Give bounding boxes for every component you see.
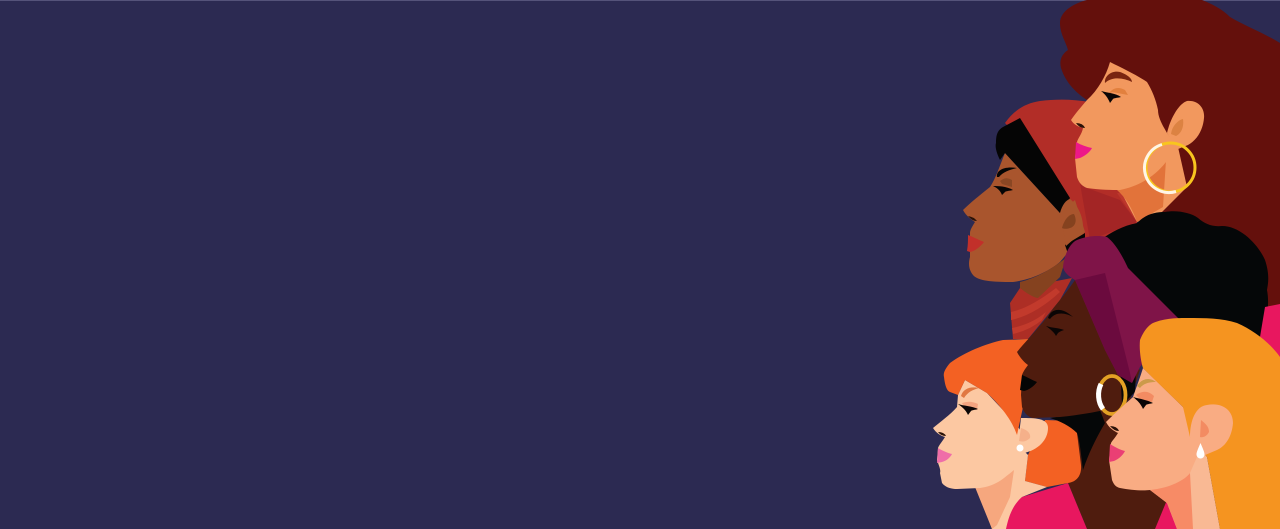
woman 1 back hair xyxy=(1060,0,1280,310)
woman 4 with orange hair xyxy=(933,339,1081,529)
nostril xyxy=(1076,123,1085,128)
woman 3 body xyxy=(1060,400,1190,529)
hoop earring xyxy=(1098,376,1126,414)
neck shadow xyxy=(1110,160,1166,222)
hair xyxy=(1140,318,1280,529)
pink top, centre xyxy=(1005,483,1087,529)
eyebrow xyxy=(1137,379,1156,388)
eyebrow xyxy=(1048,310,1073,319)
black hair under ear xyxy=(1065,233,1085,254)
ear xyxy=(1018,418,1048,453)
eye xyxy=(1101,91,1121,103)
front fringe xyxy=(944,339,1040,435)
woman 3 black hair xyxy=(1100,211,1268,345)
woman 1 face xyxy=(1071,62,1204,222)
neck shadow xyxy=(1050,410,1105,470)
eye xyxy=(1046,326,1064,336)
eyebrow xyxy=(997,168,1017,177)
ear xyxy=(1060,199,1083,246)
eyebrow xyxy=(961,387,979,398)
lips xyxy=(937,448,952,463)
back hair xyxy=(1025,420,1081,487)
woman 5 with blonde hair xyxy=(1106,318,1280,529)
woman 2 headscarf xyxy=(1005,100,1137,339)
nostril xyxy=(938,432,946,436)
eye xyxy=(1133,397,1153,409)
neck shadow xyxy=(1020,258,1066,298)
woman 3 face xyxy=(1017,236,1178,470)
face xyxy=(933,380,1024,489)
eye xyxy=(993,186,1013,195)
lips xyxy=(1020,375,1037,391)
face xyxy=(1071,62,1178,190)
eyelid xyxy=(1000,178,1012,187)
eyebrow xyxy=(1105,72,1132,83)
lips xyxy=(1075,142,1092,159)
black hair band xyxy=(996,118,1070,213)
pink top, right xyxy=(1260,304,1280,360)
neck xyxy=(975,440,1047,529)
nostril xyxy=(1110,426,1119,431)
eyelid xyxy=(962,402,978,410)
neck xyxy=(1150,437,1220,529)
pink top, right of body xyxy=(1155,500,1182,529)
eyelid xyxy=(1136,392,1154,402)
black hair behind ear xyxy=(1120,365,1136,405)
lips xyxy=(1109,444,1125,462)
face xyxy=(1106,368,1200,490)
eyelid xyxy=(1107,88,1128,96)
face xyxy=(1017,280,1140,418)
ear xyxy=(1167,101,1204,149)
hoop earring xyxy=(1144,143,1195,193)
nostril xyxy=(968,216,977,221)
scarf neck wrap xyxy=(1010,278,1072,339)
pearl earring xyxy=(1016,444,1024,452)
eye xyxy=(958,404,978,415)
lips xyxy=(967,235,984,252)
purple head wrap xyxy=(1063,236,1178,383)
neck xyxy=(1120,147,1187,222)
ear xyxy=(1190,404,1233,458)
woman 2 face xyxy=(963,118,1085,298)
drop earring xyxy=(1196,443,1204,458)
